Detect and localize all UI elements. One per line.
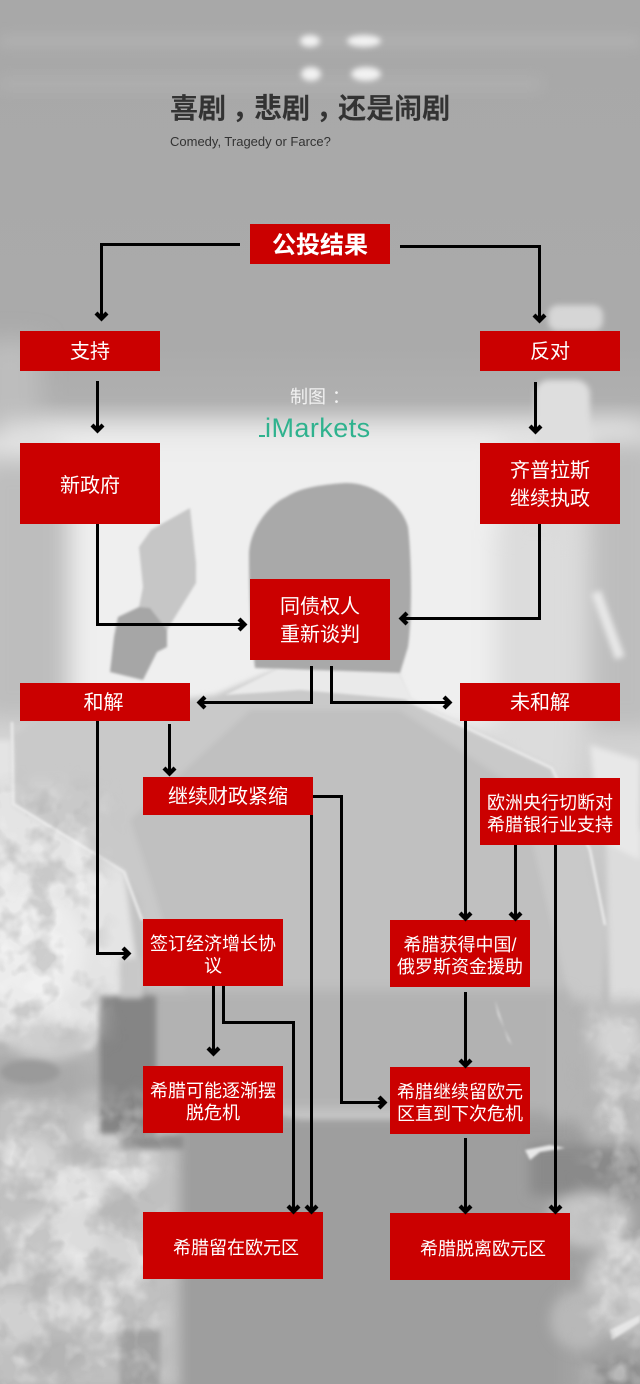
box: new government: [20, 443, 160, 524]
collar: [225, 665, 412, 700]
arrow: not reconciled to aid: [460, 721, 471, 918]
box: reconciled: 和解: [84, 692, 124, 714]
arrow: result to oppose: [400, 246, 545, 320]
jacket and arms: [0, 668, 640, 1120]
credit label: 制图 ：: [290, 383, 350, 409]
arrow: oppose to Tsipras: [530, 382, 541, 432]
arrow: ECB to leaves eurozone: [550, 845, 561, 1212]
box: new government: 新政府: [60, 475, 120, 497]
box: sign growth agreement: 签订经济增长协: [150, 934, 276, 954]
arrow: ECB to aid: [510, 845, 521, 918]
arrow: growth agreement to exits crisis: [208, 986, 219, 1054]
box: support: 支持: [70, 341, 110, 363]
box: renegotiate with creditors: 重新谈判: [280, 624, 360, 646]
arrow: Tsipras to negotiation: [402, 524, 540, 624]
head: [249, 483, 411, 673]
box: oppose: [480, 331, 620, 371]
box: referendum result: 公投结果: [272, 232, 368, 258]
box: not reconciled: 未和解: [510, 692, 570, 714]
box: Greece leaves eurozone: 希腊脱离欧元区: [420, 1238, 546, 1258]
logo: iMarkets: iMarkets: [265, 413, 371, 443]
box: stays in euro until next crisis: [390, 1067, 530, 1134]
box: oppose: 反对: [530, 341, 570, 363]
box: Greece leaves eurozone: [390, 1213, 570, 1280]
box: ECB cuts support: [480, 778, 620, 845]
box: Greece stays in eurozone: [143, 1212, 323, 1279]
box: reconciled: [20, 683, 190, 721]
left crowd: [0, 890, 180, 1384]
arrow: negotiation to not reconciled: [332, 666, 450, 708]
box: gradually exits crisis: [143, 1066, 283, 1133]
box: support: [20, 331, 160, 371]
arrow: austerity to stays until next crisis: [313, 796, 384, 1108]
box: gradually exits crisis: 希腊可能逐渐摆: [150, 1080, 276, 1100]
box: sign growth agreement: [143, 919, 283, 986]
subtitle: Comedy, Tragedy or Farce?: [170, 134, 331, 149]
arrow: result to support: [96, 244, 240, 318]
box: Tsipras stays in power: 继续执政: [510, 488, 590, 510]
arrow: support to new government: [92, 381, 103, 430]
raised hand: [139, 508, 196, 630]
arrow: aid to stays until next crisis: [460, 992, 471, 1066]
box: referendum result: [250, 224, 390, 264]
box: renegotiate with creditors: [250, 579, 390, 660]
box: aid from China or Russia: [390, 920, 530, 987]
box: aid from China or Russia: 俄罗斯资金援助: [397, 956, 523, 976]
arrow: stays until next crisis to leaves eurozone: [460, 1138, 471, 1212]
box: not reconciled: [460, 683, 620, 721]
arrow: reconciled to austerity: [164, 724, 175, 774]
arrow: growth agreement to stays in eurozone: [224, 986, 299, 1212]
box: aid from China or Russia: 希腊获得中国/: [403, 934, 516, 954]
arrow: new government to negotiation: [98, 524, 244, 630]
arrow: negotiation to reconciled: [200, 666, 312, 708]
right crowd: [530, 1000, 640, 1384]
box: continued austerity: [143, 777, 313, 815]
title: 喜剧，悲剧，还是闹剧: [170, 87, 450, 127]
box: ECB cuts support: 希腊银行业支持: [487, 814, 613, 834]
box: stays in euro until next crisis: 区直到下次危机: [397, 1104, 523, 1124]
box: ECB cuts support: 欧洲央行切断对: [487, 792, 613, 812]
box: Tsipras stays in power: [480, 443, 620, 524]
box: Tsipras stays in power: 齐普拉斯: [510, 460, 590, 482]
box: sign growth agreement: 议: [204, 956, 222, 976]
arrow: austerity to stays in eurozone: [306, 815, 317, 1212]
box: stays in euro until next crisis: 希腊继续留欧元: [397, 1082, 523, 1102]
box: Greece stays in eurozone: 希腊留在欧元区: [173, 1238, 299, 1258]
box: continued austerity: 继续财政紧缩: [168, 786, 288, 808]
box: renegotiate with creditors: 同债权人: [280, 596, 360, 618]
arrow: reconciled to growth agreement: [98, 721, 128, 959]
box: gradually exits crisis: 脱危机: [186, 1102, 240, 1122]
